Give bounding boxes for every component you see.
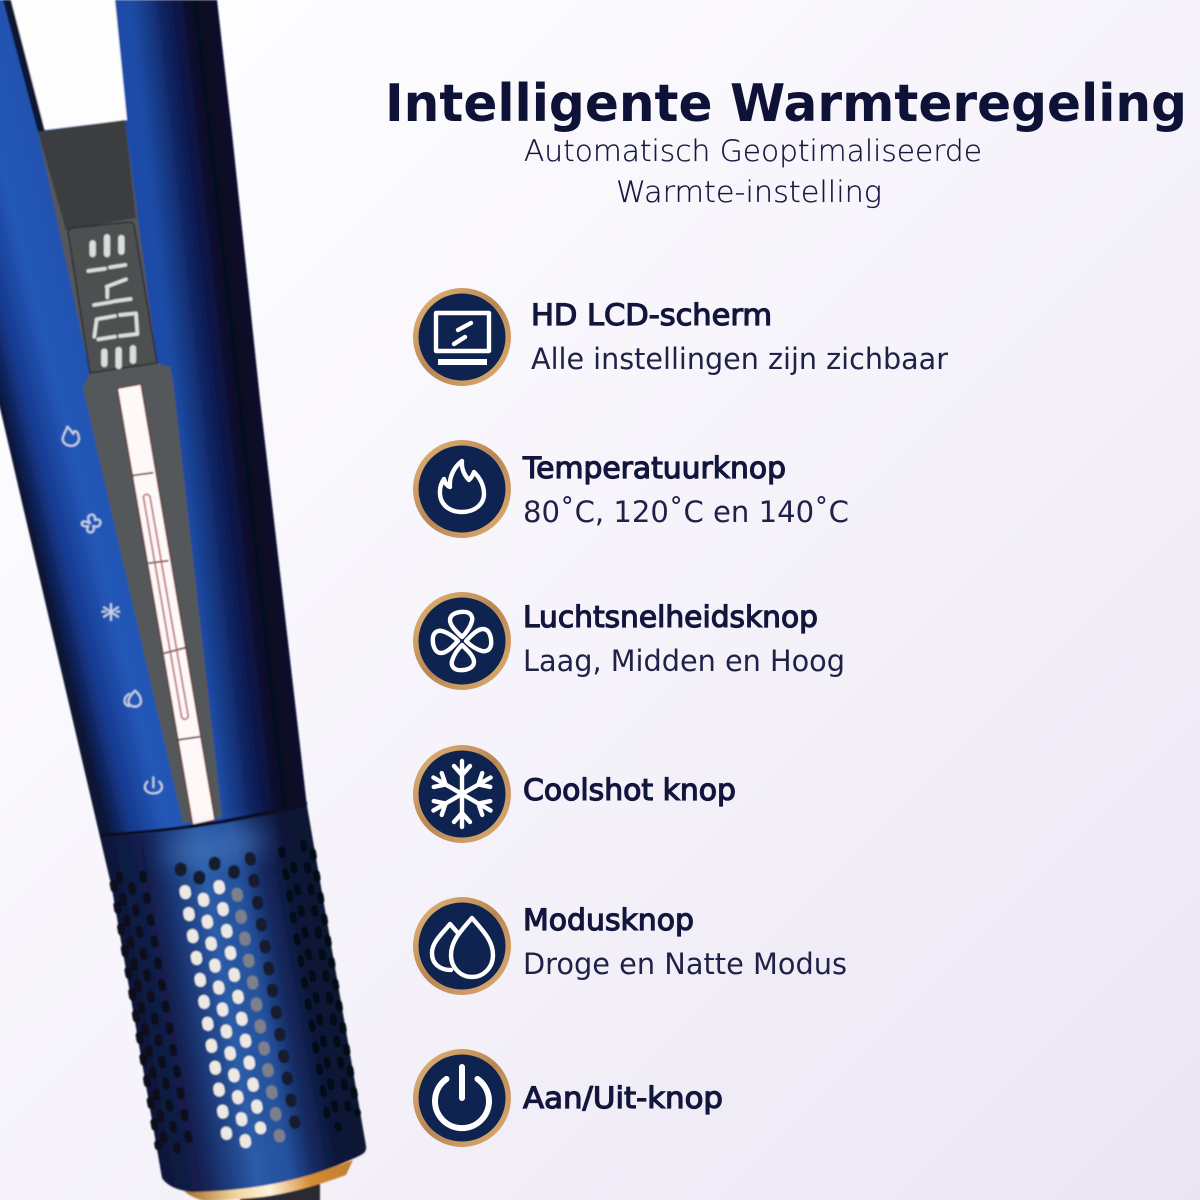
heading: Modusknop — [523, 903, 694, 937]
bright holes — [185, 886, 261, 1143]
title: Intelligente Warmteregeling — [385, 74, 1187, 134]
description: 80˚C, 120˚C en 140˚C — [523, 495, 849, 529]
icon: power — [413, 1049, 511, 1147]
hair styler device — [0, 0, 366, 1200]
heading: Temperatuurknop — [522, 451, 786, 485]
heading: HD LCD-scherm — [531, 298, 772, 332]
subtitle: Automatisch Geoptimaliseerde — [524, 134, 982, 168]
left side holes — [113, 874, 189, 1150]
feature: Luchtsnelheidsknop — [413, 592, 845, 690]
vent holes — [113, 843, 358, 1150]
inner pill outline — [143, 494, 188, 719]
subtitle: Warmte-instelling — [616, 175, 882, 209]
upper handle body — [0, 0, 312, 880]
grey holes — [237, 893, 280, 1137]
display digits 140 — [88, 237, 137, 366]
icon: fan — [413, 592, 511, 690]
icon: flame — [413, 440, 511, 538]
button strip — [117, 384, 215, 825]
handle right shading — [110, 0, 312, 850]
dark holes — [250, 857, 295, 1123]
side icons — [63, 427, 162, 793]
top dark holes — [181, 863, 234, 879]
heading: Luchtsnelheidsknop — [523, 600, 818, 634]
icon: flame — [63, 427, 79, 446]
heading: Aan/Uit-knop — [523, 1081, 723, 1115]
icon: screen — [413, 288, 511, 386]
subtitle — [524, 134, 982, 209]
metal stem below ring — [240, 1180, 320, 1200]
icon: drops — [125, 691, 141, 707]
icon: water drops — [413, 897, 511, 995]
gold ring — [184, 1160, 353, 1200]
seam — [101, 803, 307, 835]
LCD display — [68, 222, 157, 373]
icon: power — [145, 777, 162, 793]
icon: fan — [82, 515, 100, 532]
icon: snowflake — [102, 604, 119, 620]
top highlight — [165, 825, 268, 866]
upper panel dark tone — [38, 120, 136, 230]
feature: Modusknop — [413, 897, 847, 995]
description: Laag, Midden en Hoog — [523, 644, 845, 678]
grey control panel — [38, 120, 222, 823]
feature: Temperatuurknop — [413, 440, 849, 538]
cylinder shell — [103, 806, 366, 1192]
feature: Coolshot knop — [413, 745, 736, 843]
description: Droge en Natte Modus — [523, 947, 847, 981]
white opening — [10, 0, 127, 130]
right side holes — [282, 843, 358, 1128]
feature: Aan/Uit-knop — [413, 1049, 723, 1147]
feature: HD LCD-scherm — [413, 288, 948, 386]
heading: Coolshot knop — [523, 773, 736, 807]
lower vented cylinder — [101, 803, 366, 1200]
description: Alle instellingen zijn zichbaar — [531, 342, 948, 376]
dark edge of opening — [3, 0, 45, 132]
icon: snowflake — [413, 745, 511, 843]
